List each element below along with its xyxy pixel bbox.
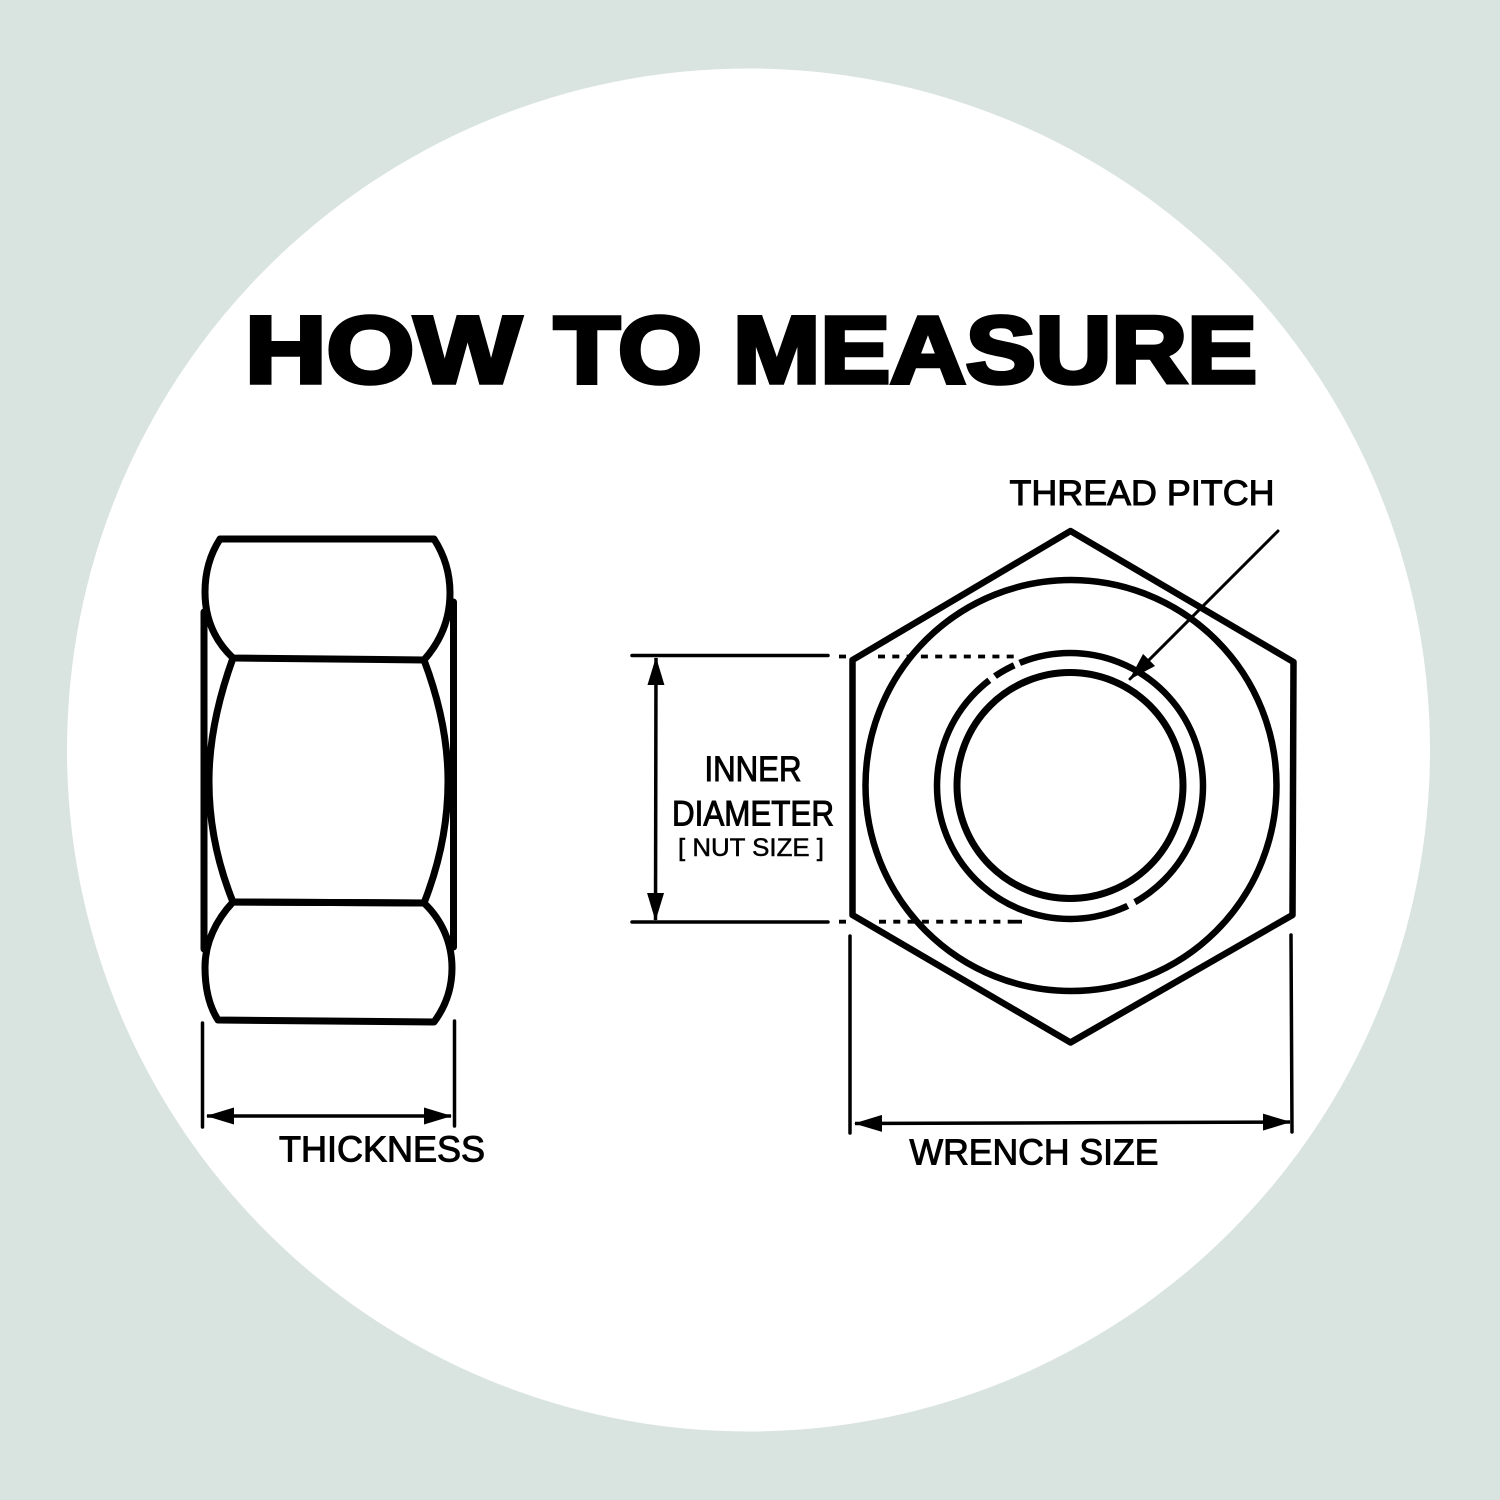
wrench size label: WRENCH SIZE <box>910 1132 1158 1172</box>
inner diameter label: [ NUT SIZE ] <box>678 834 824 862</box>
inner diameter label <box>672 750 834 862</box>
inner diameter dimension <box>632 656 1022 922</box>
bottom chamfer <box>205 902 452 1022</box>
thread pitch callout <box>1010 474 1278 679</box>
thickness dimension <box>202 1021 485 1170</box>
top chamfer <box>205 539 450 660</box>
thread circle <box>937 653 1203 919</box>
washer face circle <box>866 580 1276 991</box>
middle flat <box>209 658 448 903</box>
title: HOW <box>245 298 521 404</box>
side view of nut <box>204 539 454 1022</box>
title: MEASURE <box>733 298 1257 404</box>
side edges <box>204 602 454 949</box>
wrench size dimension <box>850 935 1292 1172</box>
inner diameter label: DIAMETER <box>672 794 834 834</box>
title <box>245 298 1257 404</box>
hexagon outline <box>852 531 1294 1042</box>
front view of nut <box>852 531 1294 1042</box>
inner diameter label: INNER <box>704 750 802 789</box>
bore circle <box>957 672 1183 898</box>
thickness label: THICKNESS <box>279 1128 485 1170</box>
arrow: thread pitch <box>1130 531 1278 679</box>
thread pitch label: THREAD PITCH <box>1010 474 1274 513</box>
title: TO <box>554 298 702 404</box>
